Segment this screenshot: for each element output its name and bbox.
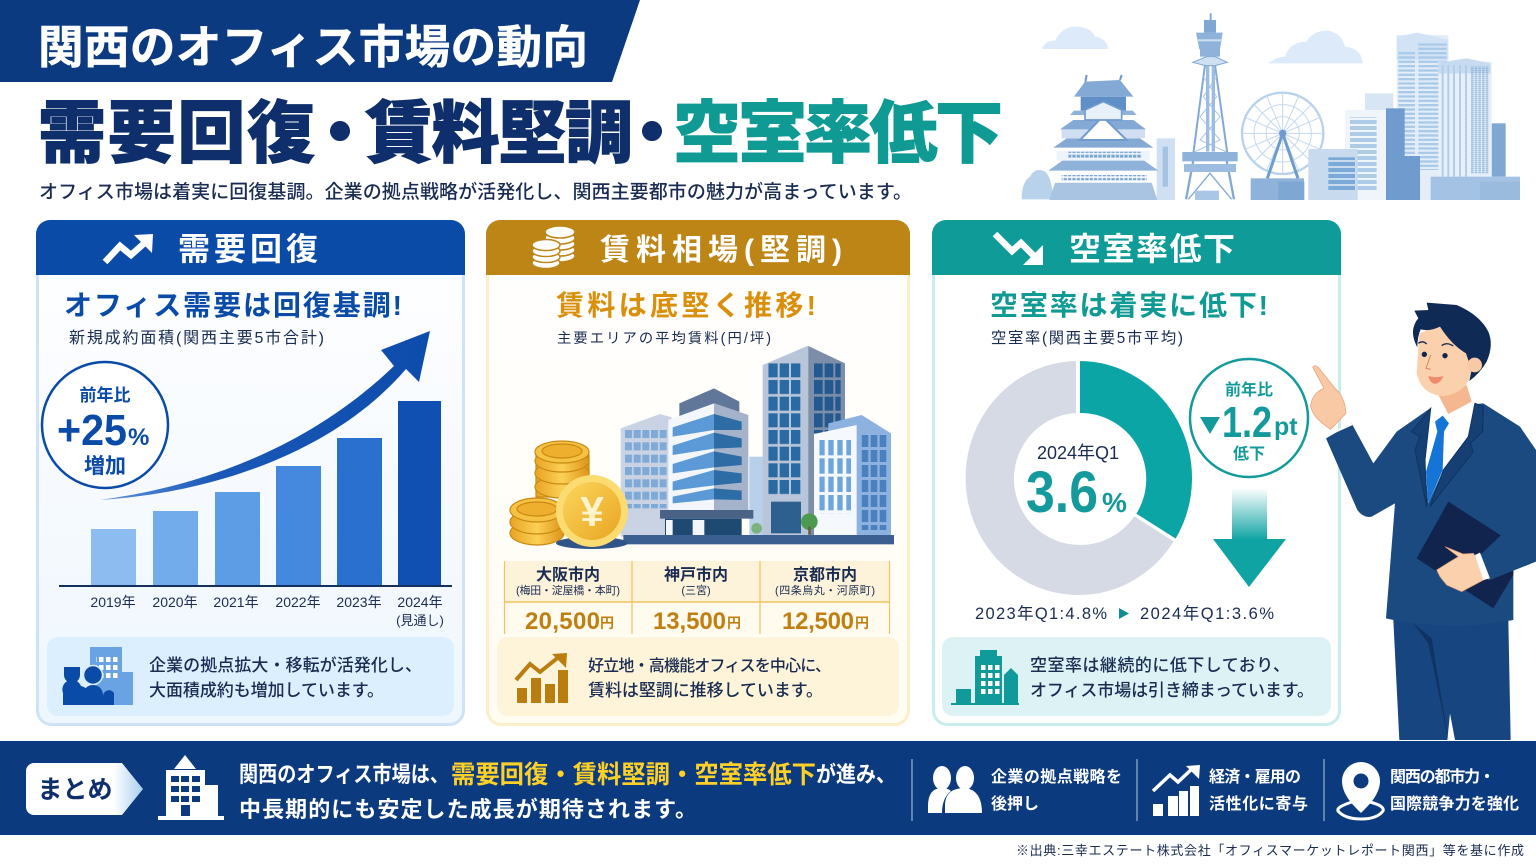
building group (621, 346, 894, 544)
icon: building (158, 755, 224, 820)
vacancy chart caption: 空室率(関西主要5市平均) (991, 330, 1183, 347)
illustration: buildings and coins: ¥ (580, 488, 604, 535)
illustration: businessman (1311, 303, 1536, 740)
summary band (0, 741, 1536, 835)
callout: +25%: % (128, 424, 149, 451)
coin stacks (510, 441, 589, 545)
note: vacancy: 空室率は継続的に低下しており、 (1030, 656, 1290, 675)
legs (1393, 620, 1511, 740)
callout: +25%: 前年比 (80, 385, 130, 405)
callout: -1.2pt (1190, 359, 1308, 477)
rent table: 20,500 (525, 608, 600, 635)
rent table (504, 561, 890, 635)
donut chart: 2024年Q1 (1037, 443, 1119, 463)
benefit 3: 関西の都市力・ (1390, 767, 1495, 786)
eyes and mouth (1418, 342, 1453, 384)
callout: -1.2pt: pt (1274, 413, 1298, 441)
benefit 2: 活性化に寄与 (1209, 794, 1308, 813)
donut chart: 3.6 (1026, 460, 1098, 525)
rent table: (梅田・淀屋橋・本町) (516, 583, 620, 597)
benefit 3: 国際競争力を強化 (1390, 795, 1519, 813)
lapels (1412, 403, 1483, 507)
benefit 2: 経済・雇用の (1209, 767, 1301, 786)
rent table: 京都市内 (793, 565, 857, 584)
callout: -1.2pt: 前年比 (1225, 380, 1273, 399)
rent table: 12,500 (782, 608, 854, 635)
headline: 需要回復 (38, 96, 315, 172)
icon: teal buildings (951, 650, 1019, 705)
note: vacancy: オフィス市場は引き締まっています。 (1030, 681, 1314, 700)
panel header: demand (36, 220, 465, 275)
rent table: (三宮) (681, 584, 711, 597)
summary text: 需要回復・賃料堅調・空室率低下 (451, 761, 816, 789)
hand holding (1437, 547, 1487, 592)
benefit 3 (1390, 767, 1519, 813)
headline (38, 96, 1003, 172)
panel header: vacancy (932, 220, 1341, 275)
headline: 空室率低下 (673, 96, 1003, 172)
bar chart: (見通し) (396, 613, 444, 628)
shirt (1425, 400, 1475, 503)
summary tag (26, 763, 143, 815)
rent table: 大阪市内 (536, 565, 600, 584)
panel header: rent: 賃料相場(堅調) (600, 234, 842, 267)
rent table: 円 (727, 615, 741, 631)
note: rent: 好立地・高機能オフィスを中心に、 (588, 657, 831, 675)
callout: +25% (42, 362, 168, 488)
rent chart caption: 主要エリアの平均賃料(円/坪) (557, 330, 771, 347)
benefit 1: 後押し (991, 794, 1039, 813)
panel header: demand: 需要回復 (178, 231, 318, 267)
vacancy comparison (975, 604, 1274, 623)
benefit 2 (1209, 767, 1308, 813)
tablet (1417, 502, 1513, 608)
rent table: (四条烏丸・河原町) (775, 583, 875, 597)
bar chart: 2024年 (397, 594, 443, 610)
office towers (1308, 33, 1520, 200)
hair (1413, 303, 1491, 381)
bar chart: 2022年 (275, 594, 321, 610)
note: demand: 企業の拠点拡大・移転が活発化し、 (149, 655, 422, 675)
note: demand: 大面積成約も増加しています。 (149, 681, 384, 700)
rent table: 13,500 (653, 608, 726, 635)
title banner: 関西のオフィス市場の動向 (38, 22, 588, 73)
hand pointing (1311, 366, 1346, 429)
icon: map pin (1338, 762, 1383, 819)
panel: vacancy (932, 220, 1341, 724)
bar chart: 2021年 (213, 594, 259, 610)
face (1417, 325, 1473, 396)
summary text: 中長期的にも安定した成長が期待されます。 (239, 797, 697, 822)
near arm (1480, 523, 1536, 581)
vacancy comparison: 2024年Q1:3.6% (1140, 604, 1274, 623)
note: demand (47, 637, 454, 716)
rent table: 円 (600, 615, 614, 631)
subtitle: オフィス市場は着実に回復基調。企業の拠点戦略が活発化し、関西主要都市の魅力が高まっています。 (39, 181, 912, 203)
callout: +25%: 増加 (84, 455, 126, 478)
note: vacancy (942, 637, 1331, 716)
arrow: growth (100, 331, 430, 500)
headline: ・ (618, 96, 686, 172)
icon: people and building (62, 647, 133, 705)
ferris wheel (1242, 93, 1323, 178)
callout: +25%: +25 (57, 406, 127, 455)
castle parts (1048, 75, 1158, 200)
illustration: buildings and coins (510, 346, 894, 549)
demand heading: オフィス需要は回復基調! (64, 290, 402, 321)
panel: demand recovery (36, 220, 465, 724)
skyline illustration (1022, 13, 1520, 200)
benefit 1: 企業の拠点戦略を (991, 767, 1122, 786)
note: rent (497, 637, 899, 716)
tower parts (1186, 13, 1234, 199)
summary text: が進み、 (816, 762, 896, 787)
benefit 1 (991, 767, 1122, 813)
tie (1426, 416, 1449, 503)
icon: rising bars (516, 653, 568, 703)
note: rent: 賃料は堅調に推移しています。 (588, 681, 823, 700)
bar chart: 2019年 (90, 594, 136, 610)
donut chart (965, 360, 1193, 596)
headline: 賃料堅調 (365, 96, 633, 172)
source note: ※出典:三幸エステート株式会社「オフィスマーケットレポート関西」等を基に作成 (1016, 843, 1524, 858)
panel header: vacancy: 空室率低下 (1069, 231, 1235, 267)
arrow: down (1213, 488, 1286, 587)
demand chart caption: 新規成約面積(関西主要5市合計) (69, 329, 324, 347)
bar chart: 2023年 (336, 594, 382, 610)
bar chart: 2020年 (152, 594, 198, 610)
panel header: rent (486, 220, 910, 275)
title banner (0, 0, 640, 82)
vacancy heading: 空室率は着実に低下! (990, 290, 1268, 321)
ear (1467, 358, 1482, 372)
rent table: 円 (855, 615, 869, 631)
rent heading: 賃料は底堅く推移! (556, 290, 816, 321)
summary text (239, 761, 896, 822)
summary text: 関西のオフィス市場は、 (239, 762, 449, 787)
neck (1438, 385, 1472, 414)
panel: rent (486, 220, 910, 724)
callout: -1.2pt: 1.2 (1222, 398, 1272, 447)
jacket (1326, 403, 1536, 626)
donut chart: % (1102, 487, 1127, 518)
callout: -1.2pt: 低下 (1233, 445, 1265, 463)
bar chart (59, 401, 452, 628)
icon: growth (1153, 765, 1200, 816)
icon: people (928, 766, 982, 813)
vacancy comparison: 2023年Q1:4.8% (975, 604, 1107, 623)
rent table: 神戸市内 (664, 565, 728, 584)
summary tag: まとめ (37, 776, 113, 804)
headline: ・ (306, 96, 374, 172)
